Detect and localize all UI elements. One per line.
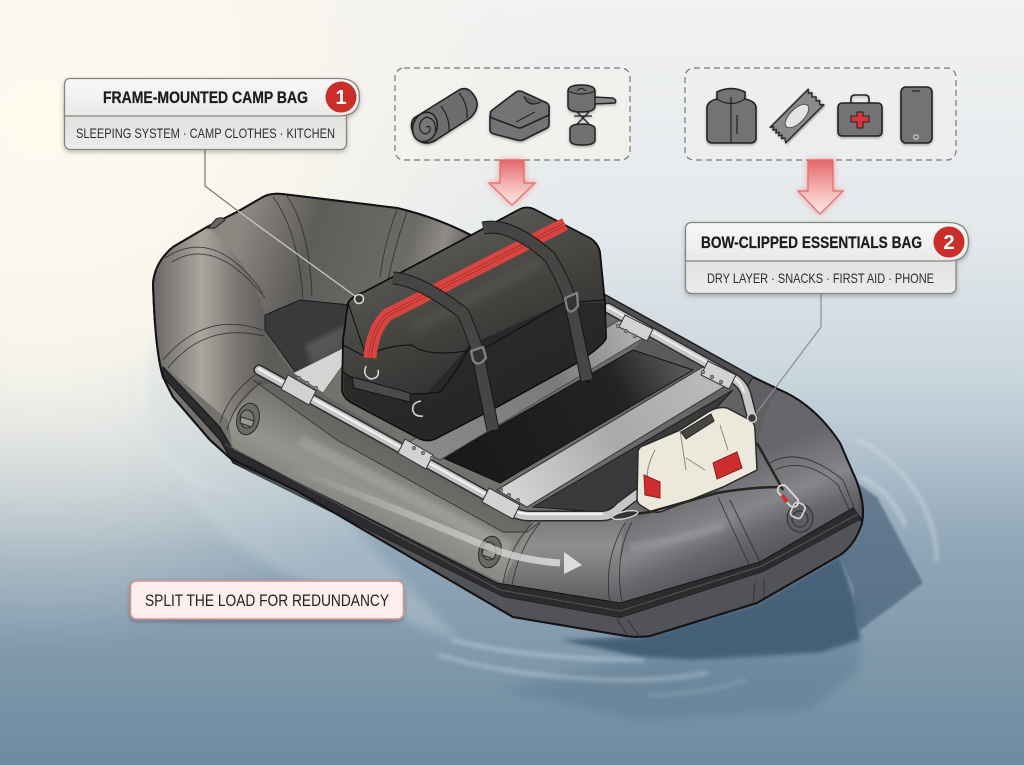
- leader line to camp bag: [205, 150, 364, 304]
- lower hull: [233, 463, 860, 637]
- leader line to essentials bag: [748, 293, 821, 422]
- dry bag body: [637, 408, 757, 512]
- raft: [153, 194, 863, 637]
- mid plate: [407, 320, 645, 460]
- callout: split the load: SPLIT THE LOAD FOR REDUNDANCY: [145, 591, 389, 610]
- dashed box: [395, 68, 630, 160]
- callout items: DRY LAYER · SNACKS · FIRST AID · PHONE: [707, 270, 934, 286]
- D-rings on bag: [365, 366, 423, 416]
- cockpit floor: [443, 350, 693, 483]
- rub strip: [163, 367, 862, 618]
- bag top highlights: [410, 262, 540, 330]
- callout title: FRAME-MOUNTED CAMP BAG: [103, 88, 308, 107]
- floor light patch: [305, 325, 345, 365]
- callout title panel: [64, 78, 360, 116]
- icon: sleeping roll: [409, 89, 477, 145]
- callout: frame-mounted camp bag: [64, 78, 360, 150]
- bag side handle strap: [352, 377, 410, 402]
- dashed box: [685, 68, 956, 160]
- floor crease: [543, 355, 590, 383]
- red patch small: [644, 475, 660, 498]
- icon: first aid kit: [838, 95, 882, 136]
- icon: snack bar: [770, 89, 824, 143]
- stern tube: [154, 227, 300, 420]
- gunwale panel: [253, 380, 540, 532]
- raft hull silhouette: [153, 194, 863, 637]
- D-ring patch bow: [787, 504, 813, 532]
- icon: phone: [901, 87, 932, 143]
- arrow: camp contents to bag: [489, 160, 535, 205]
- side highlight streak: [300, 440, 510, 548]
- left clip: [612, 509, 638, 521]
- bow highlight streak: [630, 525, 725, 548]
- callout items: SLEEPING SYSTEM · CAMP CLOTHES · KITCHEN: [76, 125, 335, 141]
- valve on stern: [208, 218, 225, 228]
- direction arrow on hull: [290, 468, 582, 574]
- D-ring patch left: [233, 401, 263, 437]
- cockpit well right: [533, 390, 733, 512]
- number badge 1: 1: [335, 87, 347, 109]
- top tube: [207, 194, 480, 315]
- callout title: BOW-CLIPPED ESSENTIALS BAG: [701, 233, 922, 252]
- icon: jacket: [707, 88, 756, 143]
- tube band beyond frame: [605, 295, 753, 390]
- bag lower shading: [344, 303, 604, 438]
- panel: essentials contents: [685, 68, 956, 160]
- dry bag folds: [647, 425, 728, 480]
- callout: bow-clipped essentials bag: [686, 222, 968, 294]
- red patch large: [713, 452, 742, 479]
- rail sleeves: [281, 315, 736, 519]
- side tube: [228, 380, 533, 583]
- rub strip lines: [225, 444, 858, 611]
- stern floor: [265, 300, 350, 372]
- front plate: [497, 367, 730, 507]
- plate rivets: [297, 324, 723, 502]
- number badge 2: 2: [943, 232, 955, 254]
- frame-mounted camp bag: [342, 208, 606, 440]
- frame rails: [259, 307, 752, 516]
- water shadow and ripples: [112, 330, 937, 720]
- straps: [393, 227, 587, 430]
- icon: folded clothes: [490, 91, 549, 140]
- bag seams: [343, 300, 605, 394]
- bow-clipped essentials bag: [612, 408, 806, 521]
- rear plate: [293, 348, 343, 393]
- number badge 1: [326, 82, 356, 112]
- callout sub panel: [686, 245, 956, 294]
- bungee cord: [612, 487, 780, 517]
- icon: camp stove: [568, 85, 616, 145]
- corner tube segment: [503, 518, 628, 603]
- callout sub panel: [64, 100, 346, 150]
- arrow: essentials to bag: [798, 160, 843, 214]
- buckles: [471, 293, 578, 364]
- bow tube: [612, 390, 859, 603]
- callout title panel: [686, 222, 968, 261]
- D-ring patch middle: [475, 534, 505, 570]
- cockpit back wall: [633, 337, 703, 370]
- hull outline: [153, 194, 863, 637]
- roll-top buckle: [681, 414, 714, 439]
- panel: camp bag contents: [395, 68, 630, 160]
- bag body: [342, 208, 606, 440]
- tube seams: [163, 196, 855, 637]
- red zipper stripe: [370, 224, 565, 358]
- callout: split the load: [130, 581, 404, 619]
- bungee to bow: [757, 443, 783, 490]
- number badge 2: [934, 226, 964, 258]
- carabiner: [776, 483, 806, 520]
